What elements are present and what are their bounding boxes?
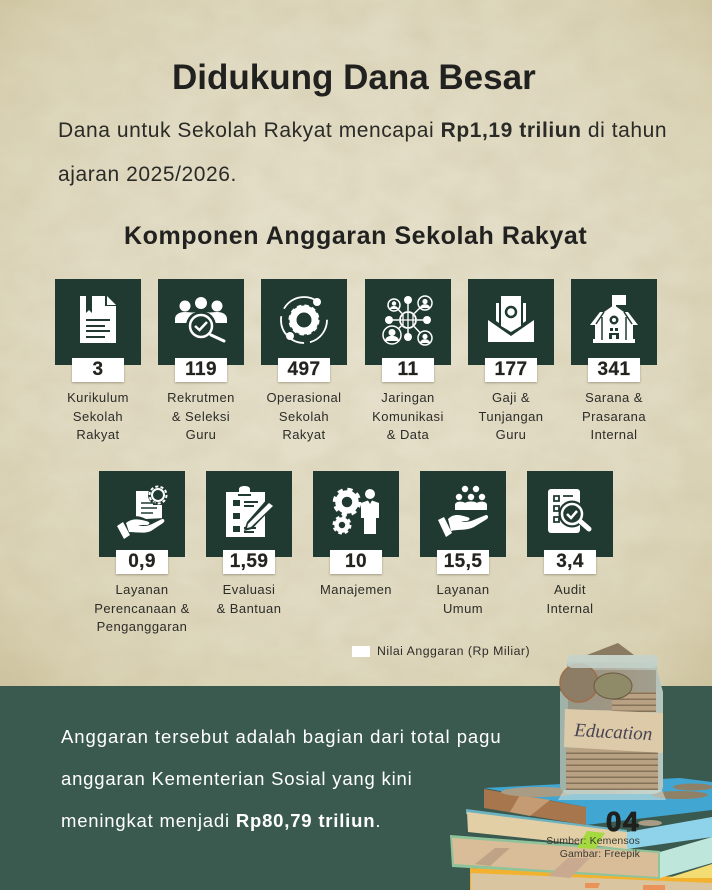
tile: Sarana & Prasarana Internal [571,279,657,442]
label: Evaluasi [223,582,275,597]
label: Operasional [266,390,342,405]
label: Gaji & [492,390,530,405]
book 3 [450,835,712,879]
label [266,390,342,442]
label [217,582,281,616]
label: Manajemen [320,582,392,597]
tile: Jaringan Komunikasi & Data [365,279,451,442]
label: Sarana & [585,390,643,405]
label: Sekolah [73,408,123,424]
icon: checklist with magnifier [527,471,613,557]
label: Kurikulum [67,390,129,405]
chart heading: Komponen Anggaran Sekolah Rakyat [124,222,587,250]
label: Rakyat [76,427,120,442]
source credits: Sumber: Kemensos [546,835,640,847]
legend swatch [352,646,370,657]
label: Guru [496,427,526,442]
value: 3 [93,359,103,380]
label [372,390,444,442]
label: Rakyat [282,427,326,442]
icon: document with bookmark [55,279,141,365]
page number: 04 [606,806,640,837]
value: 1,59 [230,551,268,572]
panel: bottom note [0,686,712,890]
label [67,390,129,442]
value [437,550,489,574]
coins on books [501,784,712,826]
note text [61,726,502,831]
label: Sekolah [279,408,329,424]
value: 11 [398,359,418,380]
label: Prasarana [582,408,646,424]
jar: Education [573,720,653,745]
label: Internal [547,600,593,616]
legend [352,644,530,658]
value: 10 [345,551,367,572]
value [382,358,434,382]
label [167,390,235,442]
intro text: ajaran 2025/2026. [58,163,237,186]
value [278,358,330,382]
label: Audit [554,582,586,597]
icon: hand holding group of people [420,471,506,557]
intro text: Dana untuk Sekolah Rakyat mencapai Rp1,19 triliun di tahun [58,119,667,142]
value [485,358,537,382]
label: Layanan [115,582,169,597]
value [588,358,640,382]
book 1 [484,778,712,825]
source credits [546,835,640,860]
label: Guru [186,427,216,442]
tile: Layanan Umum [420,471,506,616]
label: Penganggaran [97,619,187,634]
tile: Manajemen [313,471,399,597]
tile: Gaji & Tunjangan Guru [468,279,554,442]
value: 177 [495,359,527,380]
value [544,550,596,574]
icon: network of people [365,279,451,365]
label: Layanan [436,582,490,597]
icon: hand holding document and gear [99,471,185,557]
tile: Layanan Perencanaan & Penganggaran [94,471,190,634]
icon: school building [571,279,657,365]
label: Perencanaan & [94,600,190,616]
value: 119 [185,359,217,380]
label [94,582,190,634]
note text: meningkat menjadi Rp80,79 triliun. [61,810,381,831]
label: Komunikasi [372,408,444,424]
label [436,582,490,616]
label: Internal [591,427,637,442]
icon: gears and person [313,471,399,557]
icon: gear with orbit [261,279,347,365]
value [116,550,168,574]
label [478,390,544,442]
icon: people under magnifier [158,279,244,365]
value [72,358,124,382]
note text: Anggaran tersebut adalah bagian dari total pagu [61,726,502,747]
paper texture background [0,0,712,686]
value [330,550,382,574]
intro text [58,119,667,186]
value [223,550,275,574]
icon: clipboard checklist with pencil [206,471,292,557]
label [547,582,593,616]
jar [558,643,666,800]
label: & Data [387,427,429,442]
tile: Audit Internal [527,471,613,616]
label: & Seleksi [172,408,230,424]
tile: Operasional Sekolah Rakyat [261,279,347,442]
note text: anggaran Kementerian Sosial yang kini [61,768,412,789]
book 2 [466,809,712,849]
book 4 [470,864,712,890]
tile: Rekrutmen & Seleksi Guru [158,279,244,442]
icon: envelope with money [468,279,554,365]
label [582,390,646,442]
label: Jaringan [381,390,435,405]
value: 0,9 [128,551,156,572]
label: & Bantuan [217,600,281,616]
title: Didukung Dana Besar [172,58,536,97]
illustration: coin jar on stacked books [450,643,712,890]
tile: Evaluasi & Bantuan [206,471,292,616]
legend text: Nilai Anggaran (Rp Miliar) [377,644,530,658]
tile: Kurikulum Sekolah Rakyat [55,279,141,442]
value [175,358,227,382]
value: 341 [598,359,630,380]
label: Rekrutmen [167,390,235,405]
value: 3,4 [556,551,584,572]
label: Tunjangan [478,408,544,424]
value: 15,5 [444,551,482,572]
source credits: Gambar: Freepik [560,848,640,860]
value: 497 [288,359,320,380]
label: Umum [443,600,483,616]
